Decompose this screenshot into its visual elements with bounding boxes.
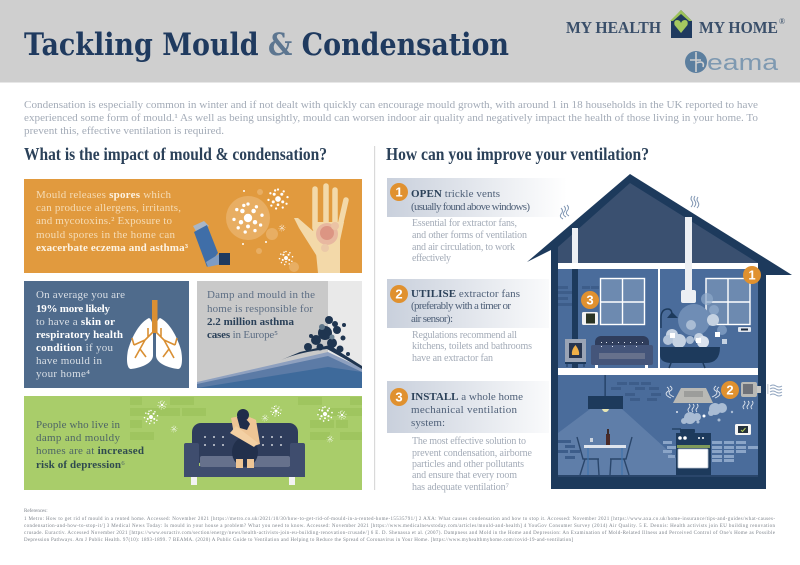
sensor and vent [582, 312, 751, 332]
step 1 heading: OPEN trickle vents [411, 188, 500, 200]
icon: lungs [127, 300, 182, 369]
step 3 body [412, 436, 533, 493]
cooker [672, 429, 711, 475]
title: Tackling Mould & Condensation [24, 27, 509, 63]
heading: ventilation: How can you improve your ventilation? [386, 144, 649, 164]
icon: spores [226, 188, 299, 272]
references: 1 Metro: How to get rid of mould in a rented home. Accessed: November 2021 [https://metro.co.uk/2021/10/30/how-to-get-rid-of-mould-in-a-rented-home-15535791/] 2 AXA: What causes condensation and how to stop it. Accessed: November 2021 [https://www.axa.co.uk/home-insurance/tips-and-guides/what-causes- [24, 517, 775, 522]
ventilation ducts [572, 217, 696, 303]
panel: lung health [24, 281, 189, 388]
logo: My Health My Home: MY HEALTH [566, 18, 661, 37]
step 3 heading [411, 391, 523, 429]
panel text: lung health: condition if you [36, 342, 114, 354]
dining table and chairs [577, 429, 632, 475]
panel text: depression: People who live in [36, 419, 120, 431]
step 2 heading: UTILISE extractor fans [411, 288, 520, 300]
step 1: trickle vents [387, 178, 567, 264]
step 1 body: Essential for extractor fans, [412, 218, 517, 229]
badge 1 [390, 183, 408, 201]
step 3 body: and ensure that every room [412, 470, 517, 481]
windows [600, 278, 750, 324]
step 3 body: The most effective solution to [412, 436, 526, 447]
panel text: depression [36, 419, 144, 471]
step 1 body: and air circulation, to work [412, 242, 515, 253]
cooker hood [666, 386, 753, 412]
illustration: mould spores [144, 401, 346, 442]
panel text: lung health: to have a skin or [36, 316, 115, 328]
marker 2 [721, 381, 739, 399]
step 1 heading [411, 188, 530, 213]
step 2 body: kitchens, toilets and bathrooms [412, 341, 532, 352]
step 3 body: prevent condensation, airborne [412, 448, 533, 459]
panel: asthma [197, 281, 362, 388]
rising air: roof vents [560, 196, 699, 219]
panel text: depression: risk of depression⁶ [36, 459, 125, 471]
step 1 body [412, 218, 527, 264]
step 3: mechanical ventilation [387, 381, 567, 493]
panel text: depression: damp and mouldy [36, 432, 120, 444]
steam in bathroom [663, 293, 727, 348]
extractor fan [741, 382, 768, 397]
references [24, 509, 776, 543]
step 3 heading: system: [411, 417, 445, 429]
marker 1: 1 [748, 268, 756, 282]
marker 3 [581, 291, 599, 309]
panel text: lung health: 19% more likely [36, 303, 110, 315]
panel text: depression: homes are at increased [36, 445, 144, 457]
panel text: asthma: 2.2 million asthma [207, 316, 294, 328]
badge 3: 3 [395, 390, 403, 404]
header band [0, 0, 800, 82]
step 2 heading: (preferably with a timer or [411, 300, 511, 312]
badge 1: 1 [395, 184, 403, 200]
stove [565, 332, 586, 367]
references: Depression Pathways. Am J Public Health. 97(10): 1893-1899. 7 BEAMA. (2020) A Public Guide to Ventilation and Helping to Reduce the Spread of Coronavirus in Your Home. [https://www.myhealthmyhome.com/covid-19-and-ventilation] [24, 538, 573, 543]
air sensor [735, 424, 751, 435]
marker 3: 3 [586, 292, 594, 308]
panel text: asthma: cases in Europe⁵ [207, 329, 278, 341]
step 3 body: has adequate ventilation⁷ [412, 482, 510, 493]
panel text: lung health [36, 289, 125, 380]
logo: My Health My Home [566, 10, 785, 38]
panel text: asthma: home is responsible for [207, 303, 313, 315]
references: crusade. Euractiv. Accessed November 2021 [https://www.euractiv.com/section/energy/news/health-activists-join-eu-building-renovation-crusade/] 6 E. D. Shenassa et al. (2007). Dampness and Mold in the Home and Depression: An Examination of Mold-Related Illness and Perceived Control of One's Home as Possible [24, 531, 776, 536]
logo: BEAMA: eama [707, 50, 779, 75]
panel text: lung health: On average you are [36, 289, 125, 301]
panel text: spores: exacerbate eczema and asthma³ [36, 242, 189, 254]
upper floor [558, 263, 758, 375]
icon: hand with eczema [294, 186, 346, 273]
illustration: person on sofa [184, 409, 305, 485]
icon: inhaler [193, 221, 230, 267]
step 2 body: Regulations recommend all [412, 330, 517, 341]
badge 3 [390, 388, 408, 406]
intro paragraph: Condensation is especially common in winter and if not dealt with quickly can encourage mould growth, with around 1 in 18 households in the UK reported to have [24, 99, 758, 111]
step 2 heading: air sensor): [411, 313, 453, 325]
logo: My Health My Home: MY HOME [699, 18, 778, 37]
marker 2: 2 [726, 382, 734, 398]
upstairs sofa [591, 336, 653, 368]
panel text: spores: and mycotoxins.² Exposure to [36, 215, 172, 227]
step 3 heading: INSTALL a whole home [411, 391, 523, 403]
heading: impact: What is the impact of mould & condensation? [24, 144, 327, 164]
panel: depression [24, 396, 362, 490]
panel text: spores: Mould releases spores which [36, 189, 172, 201]
marker 1 [743, 266, 761, 284]
step 2: extractor fans [387, 279, 567, 364]
badge 2 [390, 285, 408, 303]
step 1 heading: (usually found above windows) [411, 201, 530, 213]
step 2 heading [411, 288, 520, 325]
steam in kitchen [676, 403, 733, 424]
lower floor: kitchen [558, 375, 758, 477]
panel text: lung health: have mould in [36, 355, 102, 367]
badge 2: 2 [395, 286, 403, 302]
panel text: asthma: Damp and mould in the [207, 289, 315, 301]
logo: BEAMA [685, 50, 779, 75]
step 1 body: effectively [412, 253, 451, 264]
panel text: spores: can produce allergens, irritants, [36, 202, 181, 214]
panel text: asthma [207, 289, 315, 341]
panel text: lung health: your home⁴ [36, 368, 90, 380]
intro paragraph: prevent this, effective ventilation is required. [24, 125, 224, 137]
step 3 body: particles and other pollutants [412, 459, 524, 470]
references: References: [24, 509, 48, 514]
roof and attic [527, 174, 792, 489]
house illustration [527, 174, 792, 489]
step 2 body: have an extractor fan [412, 353, 493, 364]
intro paragraph: experienced some form of mould.¹ As well as being unsightly, mould can worsen indoor air quality and negatively impact the health of those living in your home. To [24, 112, 759, 124]
panel: spores [24, 179, 362, 273]
panel text: lung health: respiratory health [36, 329, 123, 341]
pendant lamp [588, 375, 623, 412]
panel text: spores: mould spores in the home can [36, 229, 176, 241]
step 3 heading: mechanical ventilation [411, 404, 518, 416]
step 1 body: and other forms of ventilation [412, 230, 527, 241]
intro paragraph [24, 99, 759, 137]
bath and shower [660, 309, 720, 368]
step 2 body [412, 330, 532, 364]
airflow outside [770, 385, 782, 396]
panel text: spores [36, 189, 189, 254]
illustration: roof with mould [197, 316, 362, 388]
logo: My Health My Home: ® [779, 17, 785, 26]
references: condensation-and-how-to-stop-it/] 3 Medical News Today: Is mould in your house a problem? What you need to know. Accessed: November 2021 [https://www.medicalnewstoday.com/articles/mould-and-health] 4 YouGov Consumer Survey (2014) Air Quality. 5 E. Dennis: Health activists join EU building renovation [24, 524, 776, 529]
